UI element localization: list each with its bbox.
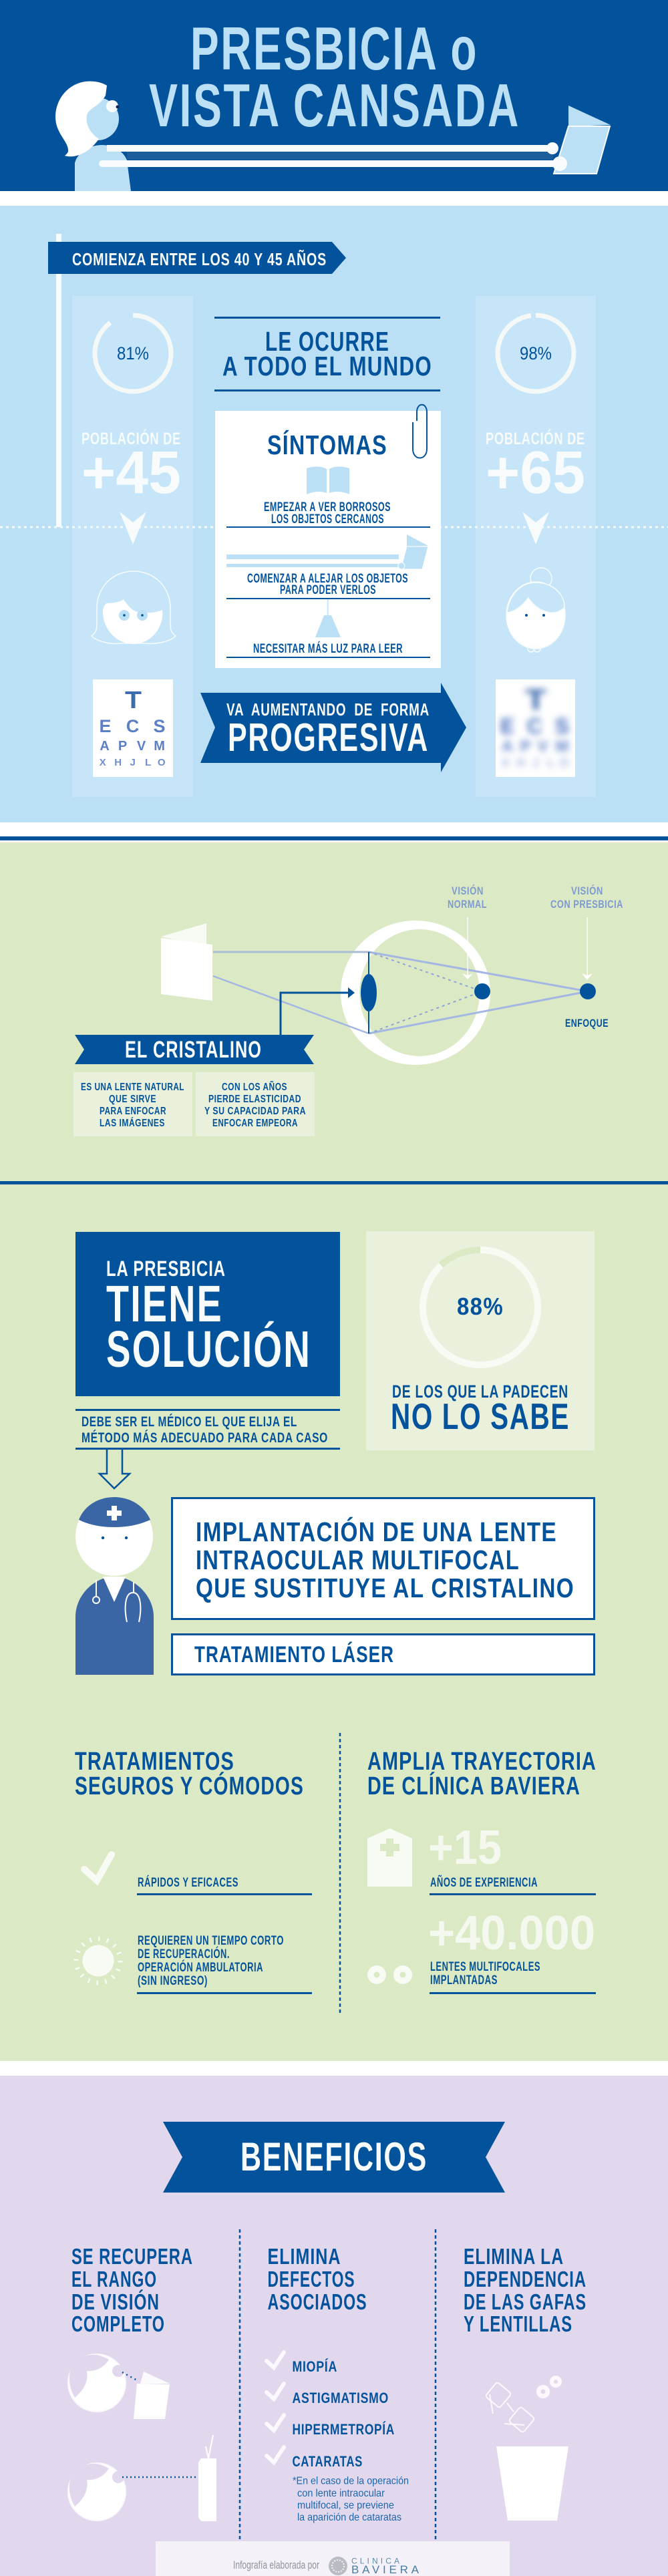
panel: tiene solución — [75, 1232, 340, 1396]
chart: blurred eye chart — [496, 679, 575, 777]
label: población de +65: +65 — [486, 440, 585, 506]
icon: head reading far — [68, 2435, 216, 2521]
text block: debe ser el médico: DEBE SER EL MÉDICO EL QUE ELIJA EL — [81, 1414, 297, 1430]
chart: blurred eye chart: C — [527, 714, 543, 738]
stat: +40.000: +40.000 — [428, 1907, 595, 1960]
panel: lente natural: LAS IMÁGENES — [100, 1116, 165, 1129]
arrow: down right — [522, 512, 549, 544]
icon: check — [84, 1855, 112, 1881]
heading: se recupera el rango: EL RANGO — [71, 2267, 157, 2291]
stat: +15: AÑOS DE EXPERIENCIA — [430, 1875, 538, 1890]
lens — [361, 952, 377, 1033]
chart: blurred eye chart: O — [560, 756, 569, 770]
footnote: *En el caso de la operación — [293, 2476, 409, 2486]
heading: elimina defectos — [267, 2244, 367, 2314]
panel: pierde elasticidad: Y SU CAPACIDAD PARA — [204, 1106, 306, 1117]
panel: tratamientos seguros — [75, 1748, 312, 1994]
panel: no lo sabe: DE LOS QUE LA PADECEN — [392, 1382, 568, 1402]
stat: +40.000: LENTES MULTIFOCALES — [430, 1960, 540, 1974]
item: miopía — [267, 2352, 337, 2375]
text: tiempo corto: DE RECUPERACIÓN. — [138, 1947, 230, 1961]
panel: no lo sabe — [366, 1231, 595, 1450]
text: tiempo corto: REQUIEREN UN TIEMPO CORTO — [138, 1934, 284, 1948]
stat: +40.000: IMPLANTADAS — [430, 1973, 498, 1987]
symptom: borrosos — [226, 500, 430, 528]
label: visión con presbicia — [550, 884, 623, 911]
item: astigmatismo: ASTIGMATISMO — [293, 2390, 389, 2406]
text block: debe ser el médico: MÉTODO MÁS ADECUADO PARA CADA CASO — [81, 1430, 328, 1446]
light rays — [213, 952, 588, 1033]
text: rápidos y eficaces — [137, 1875, 312, 1895]
focus point presbyopia — [580, 983, 596, 999]
panel: pierde elasticidad: ENFOCAR EMPEORA — [212, 1118, 298, 1129]
heading: tratamientos seguros y cómodos: TRATAMIENTOS — [75, 1748, 234, 1776]
heading: amplia trayectoria: DE CLÍNICA BAVIERA — [367, 1771, 580, 1800]
panel: lente natural: PARA ENFOCAR — [100, 1106, 166, 1117]
title — [149, 15, 520, 140]
column: dependencia gafas — [464, 2244, 587, 2521]
panel: pierde elasticidad: CON LOS AÑOS — [222, 1080, 287, 1093]
panel: pierde elasticidad — [196, 1072, 315, 1136]
heading: síntomas: SÍNTOMAS — [267, 430, 387, 460]
icon: glasses — [485, 2382, 535, 2433]
heading: elimina la dependencia — [464, 2244, 587, 2336]
label: enfoque: ENFOQUE — [565, 1017, 609, 1029]
heading: tratamientos seguros y cómodos: SEGUROS Y CÓMODOS — [75, 1771, 304, 1800]
icon: paperclip — [413, 405, 427, 458]
panel: implantación lente: INTRAOCULAR MULTIFOCAL — [196, 1545, 520, 1575]
symptom: luz: NECESITAR MÁS LUZ PARA LEER — [253, 641, 403, 656]
text: rápidos y eficaces: RÁPIDOS Y EFICACES — [138, 1875, 238, 1890]
panel: implantación lente — [172, 1498, 595, 1619]
panel: implantación lente: IMPLANTACIÓN DE UNA LENTE — [196, 1516, 557, 1547]
item: astigmatismo — [267, 2384, 389, 2406]
panel: no lo sabe: NO LO SABE — [391, 1396, 570, 1437]
title: VISTA CANSADA — [149, 72, 520, 140]
heading: amplia trayectoria — [367, 1748, 597, 1800]
chart: blurred eye chart: V — [538, 738, 548, 756]
heading: elimina la dependencia: DE LAS GAFAS — [464, 2289, 587, 2314]
icon: older woman face — [506, 568, 565, 652]
stat: +40.000 — [428, 1907, 596, 1994]
heading: elimina la dependencia: ELIMINA LA — [464, 2244, 564, 2269]
panel: implantación lente: QUE SUSTITUYE AL CRISTALINO — [196, 1573, 574, 1603]
chart: blurred eye chart: T — [525, 683, 546, 716]
icon: book — [161, 923, 212, 1001]
icon: lamp — [315, 599, 341, 637]
chart: sharp eye chart: S — [153, 716, 166, 736]
title: PRESBICIA o — [190, 15, 478, 83]
chart: sharp eye chart: H — [114, 757, 122, 768]
chart: 88% ring: 88% — [457, 1293, 504, 1320]
symptom: borrosos: EMPEZAR A VER BORROSOS — [264, 500, 391, 514]
chart: sharp eye chart: M — [154, 739, 166, 754]
item: cataratas — [267, 2447, 363, 2470]
arrow: down outline — [100, 1450, 130, 1488]
logo: CLINICA — [351, 2556, 399, 2565]
icon: arms holding book — [226, 534, 428, 569]
icon: contact lens small — [536, 2376, 562, 2398]
heading: se recupera el rango: DE VISIÓN — [71, 2289, 160, 2314]
chart: blurred eye chart: H — [516, 756, 526, 770]
arrow: normal — [462, 917, 473, 979]
chart: blurred eye chart: M — [556, 738, 569, 756]
panel: tiene solución: SOLUCIÓN — [106, 1321, 311, 1378]
item: cataratas: CATARATAS — [293, 2453, 363, 2470]
item: hipermetropía — [267, 2415, 395, 2438]
label: visión con presbicia: CON PRESBICIA — [550, 898, 623, 911]
chart: sharp eye chart: C — [126, 716, 140, 736]
label: visión normal — [448, 884, 487, 911]
chart: 98% ring: 98% — [520, 343, 552, 363]
heading: elimina la dependencia: Y LENTILLAS — [464, 2311, 572, 2336]
icon: cup — [496, 2446, 568, 2521]
heading: se recupera el rango: COMPLETO — [71, 2311, 165, 2336]
footer: Infografía elaborada por — [233, 2559, 319, 2571]
arrow: va aumentando de forma progresiva: VA AUMENTANDO DE FORMA — [226, 699, 430, 719]
heading: amplia trayectoria: AMPLIA TRAYECTORIA — [367, 1748, 597, 1776]
banner: beneficios — [163, 2122, 505, 2193]
heading: elimina defectos: DEFECTOS — [267, 2267, 355, 2291]
stat: +15: +15 — [428, 1821, 502, 1875]
item: miopía: MIOPÍA — [293, 2358, 337, 2375]
panel: beneficios section background — [0, 2076, 668, 2576]
chart: sharp eye chart: L — [145, 757, 152, 768]
chart: sharp eye chart: E — [99, 716, 112, 736]
text: tiempo corto — [137, 1934, 312, 1994]
heading: le ocurre a todo el mundo: A TODO EL MUNDO — [222, 351, 432, 381]
arrow: cristalino pointer — [281, 987, 355, 1035]
icon: woman face — [92, 571, 176, 644]
panel: tiene solución: LA PRESBICIA — [106, 1257, 226, 1281]
column: defectos asociados — [267, 2244, 409, 2523]
label: visión con presbicia: VISIÓN — [571, 884, 603, 897]
panel: lente natural: QUE SIRVE — [109, 1094, 156, 1105]
panel: tratamiento láser — [172, 1634, 595, 1674]
chart: sharp eye chart: A — [100, 739, 110, 754]
symptom: alejar: COMENZAR A ALEJAR LOS OBJETOS — [247, 572, 408, 586]
panel: tratamiento láser: TRATAMIENTO LÁSER — [194, 1642, 394, 1667]
chart: blurred eye chart: J — [532, 756, 539, 770]
chart: blurred eye chart: S — [555, 714, 570, 738]
heading: se recupera el rango — [71, 2244, 193, 2336]
chart: 88% ring — [423, 1250, 538, 1365]
text: tiempo corto: (SIN INGRESO) — [138, 1974, 208, 1988]
heading: le ocurre a todo el mundo: LE OCURRE — [265, 326, 389, 357]
chart: blurred eye chart: L — [547, 756, 555, 770]
flag pole — [56, 234, 61, 527]
footnote: la aparición de cataratas — [297, 2512, 401, 2523]
icon: doctor — [75, 1497, 154, 1675]
footnote: multifocal, se previene — [297, 2500, 394, 2511]
item: hipermetropía: HIPERMETROPÍA — [293, 2421, 395, 2438]
panel: pierde elasticidad: PIERDE ELASTICIDAD — [208, 1094, 301, 1105]
chart: sharp eye chart: X — [100, 757, 106, 768]
eyeball — [341, 921, 490, 1065]
text block: debe ser el médico — [75, 1409, 340, 1450]
heading: elimina defectos: ASOCIADOS — [267, 2289, 367, 2314]
heading: elimina defectos: ELIMINA — [267, 2244, 341, 2269]
chart: blurred eye chart: A — [502, 738, 514, 756]
panel: comienza section background — [0, 206, 668, 822]
chart: sharp eye chart: O — [158, 757, 166, 768]
chart: blurred eye chart: P — [520, 738, 531, 756]
chart: blurred eye chart: X — [502, 756, 510, 770]
diagram: eye — [161, 884, 623, 1065]
chart: blurred eye chart: E — [500, 714, 515, 738]
logo — [329, 2556, 420, 2576]
focus point normal — [474, 983, 490, 999]
icon: open book — [307, 466, 349, 494]
chart: sharp eye chart: T — [125, 686, 142, 713]
chart: 81% ring — [95, 315, 171, 391]
chart: 98% ring — [498, 315, 574, 391]
icon: head reading near — [68, 2354, 170, 2419]
panel: green section background — [0, 842, 668, 2061]
label: población de +45: +45 — [81, 440, 181, 506]
text: tiempo corto: OPERACIÓN AMBULATORIA — [138, 1960, 263, 1975]
heading: tratamientos seguros y cómodos — [75, 1748, 304, 1800]
footnote: con lente intraocular — [297, 2488, 385, 2499]
label: visión normal: NORMAL — [448, 898, 487, 911]
icon: sun — [76, 1939, 120, 1983]
panel: síntomas — [215, 405, 441, 668]
banner: comienza entre los 40 y 45 años: COMIENZA ENTRE LOS 40 Y 45 AÑOS — [72, 249, 327, 269]
heading: elimina la dependencia: DEPENDENCIA — [464, 2267, 587, 2291]
logo: BAVIERA — [351, 2563, 420, 2576]
footnote — [293, 2476, 409, 2523]
banner: beneficios: BENEFICIOS — [240, 2134, 428, 2179]
arrow: down left — [120, 512, 146, 544]
chart: sharp eye chart: V — [137, 739, 146, 754]
label: visión normal: VISIÓN — [452, 884, 484, 897]
chart: sharp eye chart: J — [130, 757, 136, 768]
chart: sharp eye chart: P — [118, 739, 128, 754]
heading: le ocurre a todo el mundo — [214, 317, 440, 391]
panel: tiene solución: TIENE — [106, 1275, 223, 1333]
panel: lente natural: ES UNA LENTE NATURAL — [81, 1082, 184, 1093]
label: población de +65: POBLACIÓN DE — [486, 428, 585, 448]
icon: hospital — [367, 1828, 412, 1887]
chart: sharp eye chart — [93, 679, 173, 777]
heading: se recupera el rango: SE RECUPERA — [71, 2244, 193, 2269]
footer — [156, 2541, 510, 2576]
panel: población +65 — [476, 296, 596, 797]
icon: contact lenses — [367, 1965, 412, 1984]
symptom: alejar: PARA PODER VERLOS — [280, 583, 376, 597]
arrow: va aumentando de forma progresiva: PROGRESIVA — [228, 715, 429, 760]
symptom: alejar — [226, 572, 430, 599]
arrow: presbicia — [582, 917, 593, 980]
panel: header — [0, 0, 668, 191]
panel: amplia trayectoria — [367, 1748, 597, 1994]
banner: el cristalino: EL CRISTALINO — [125, 1037, 262, 1063]
icon: person reading — [55, 82, 611, 191]
chart: 81% ring: 81% — [117, 343, 149, 363]
panel: lente natural — [73, 1072, 192, 1136]
panel: población +45 — [72, 296, 193, 797]
banner: comienza entre los 40 y 45 años — [48, 242, 346, 274]
arrow: va aumentando de forma progresiva — [200, 683, 466, 772]
column: rango de visión — [68, 2244, 216, 2521]
stat: +15 — [428, 1821, 596, 1895]
label: población de +45: POBLACIÓN DE — [81, 428, 181, 448]
symptom: borrosos: LOS OBJETOS CERCANOS — [271, 512, 384, 526]
